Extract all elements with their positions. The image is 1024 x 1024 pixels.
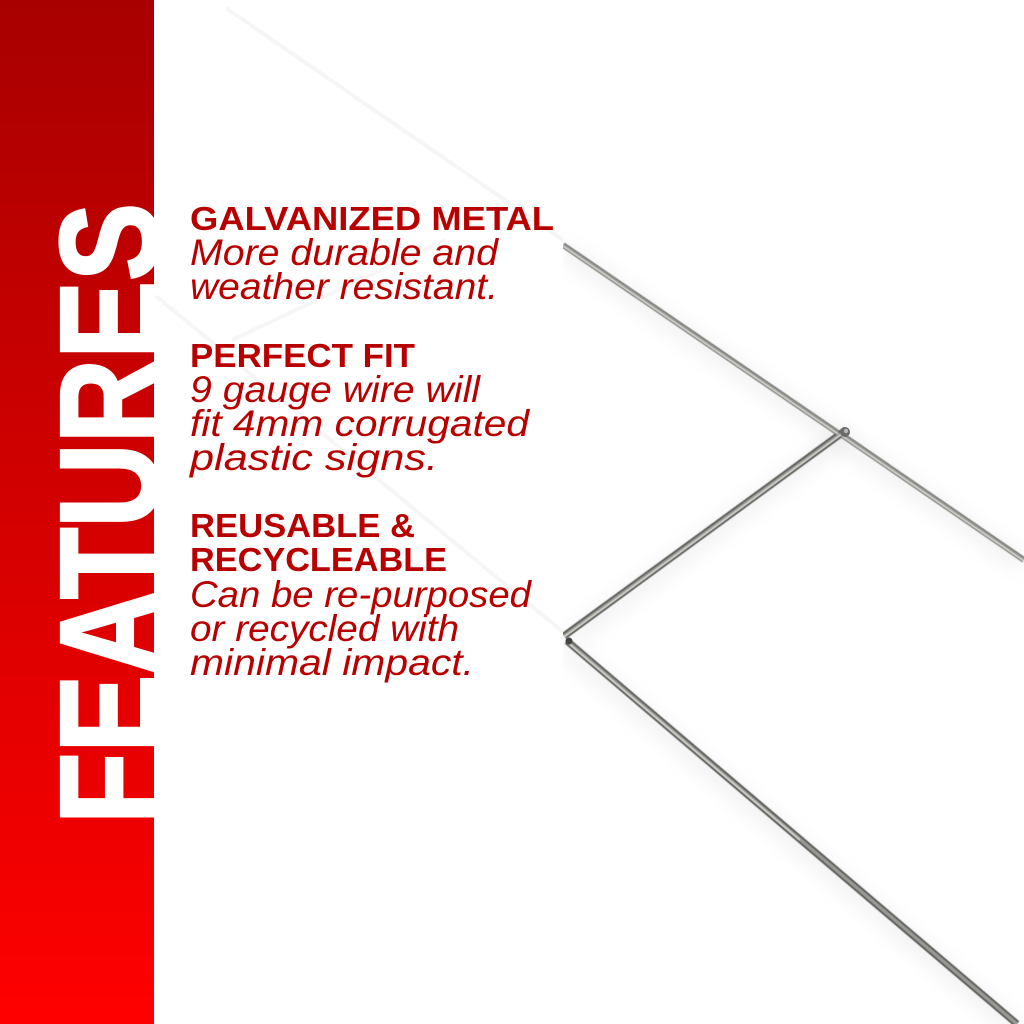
photo: metal wire sign stake: [563, 245, 1024, 1024]
text block: perfect fit: PERFECT FIT: [190, 337, 415, 374]
text block: perfect fit: plastic signs.: [189, 437, 438, 478]
text block: perfect fit: fit 4mm corrugated: [190, 403, 531, 444]
text block: perfect fit: [189, 337, 531, 478]
panel: red sidebar: [0, 0, 154, 1024]
text block: reusable and recycleable: or recycled with: [190, 608, 459, 649]
text block: galvanized metal: GALVANIZED METAL: [190, 200, 554, 237]
text block: reusable and recycleable: [190, 507, 532, 683]
text block: reusable and recycleable: RECYCLEABLE: [190, 541, 447, 578]
text block: reusable and recycleable: Can be re-purposed: [190, 574, 532, 615]
text block: reusable and recycleable: REUSABLE &: [190, 507, 415, 544]
text block: galvanized metal: weather resistant.: [190, 266, 498, 307]
white text panel over faded wire: [154, 0, 563, 1024]
text block: reusable and recycleable: minimal impact.: [190, 642, 474, 683]
text block: galvanized metal: [190, 200, 554, 307]
title: FEATURES: FEATURES: [32, 203, 187, 824]
text block: galvanized metal: More durable and: [190, 232, 499, 273]
text block: perfect fit: 9 gauge wire will: [190, 369, 482, 410]
